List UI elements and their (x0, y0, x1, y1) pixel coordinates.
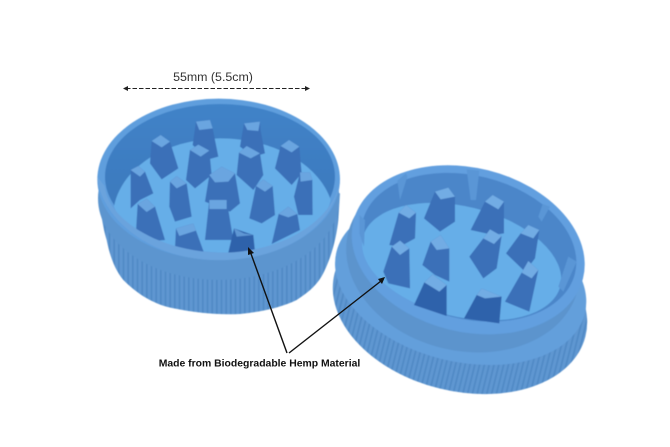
right grinder inner wall (345, 151, 592, 343)
right grinder teeth (383, 188, 539, 323)
right grinder floor (350, 184, 574, 340)
left grinder rim (97, 99, 340, 260)
right grinder rim (334, 142, 603, 358)
left grinder smooth band (98, 117, 339, 280)
left grinder half (97, 99, 340, 314)
left grinder floor (114, 138, 331, 253)
dimension arrow: 55mm (123, 86, 310, 91)
right grinder half (314, 141, 606, 420)
left grinder ribbed body (98, 160, 340, 314)
right grinder ribbed base (314, 190, 606, 420)
right grinder rim notches (359, 169, 577, 292)
pointer arrow to right grinder (289, 277, 385, 353)
pointer arrow to left grinder (248, 247, 287, 353)
left grinder rim front highlight (97, 177, 340, 260)
material caption: Made from Biodegradable Hemp Material (159, 358, 360, 370)
right grinder collar (327, 141, 603, 377)
dimension label: 55mm (5.5cm) (173, 70, 253, 84)
left grinder teeth (131, 120, 313, 253)
left grinder inner wall (105, 104, 335, 249)
right grinder ledge (317, 175, 604, 390)
